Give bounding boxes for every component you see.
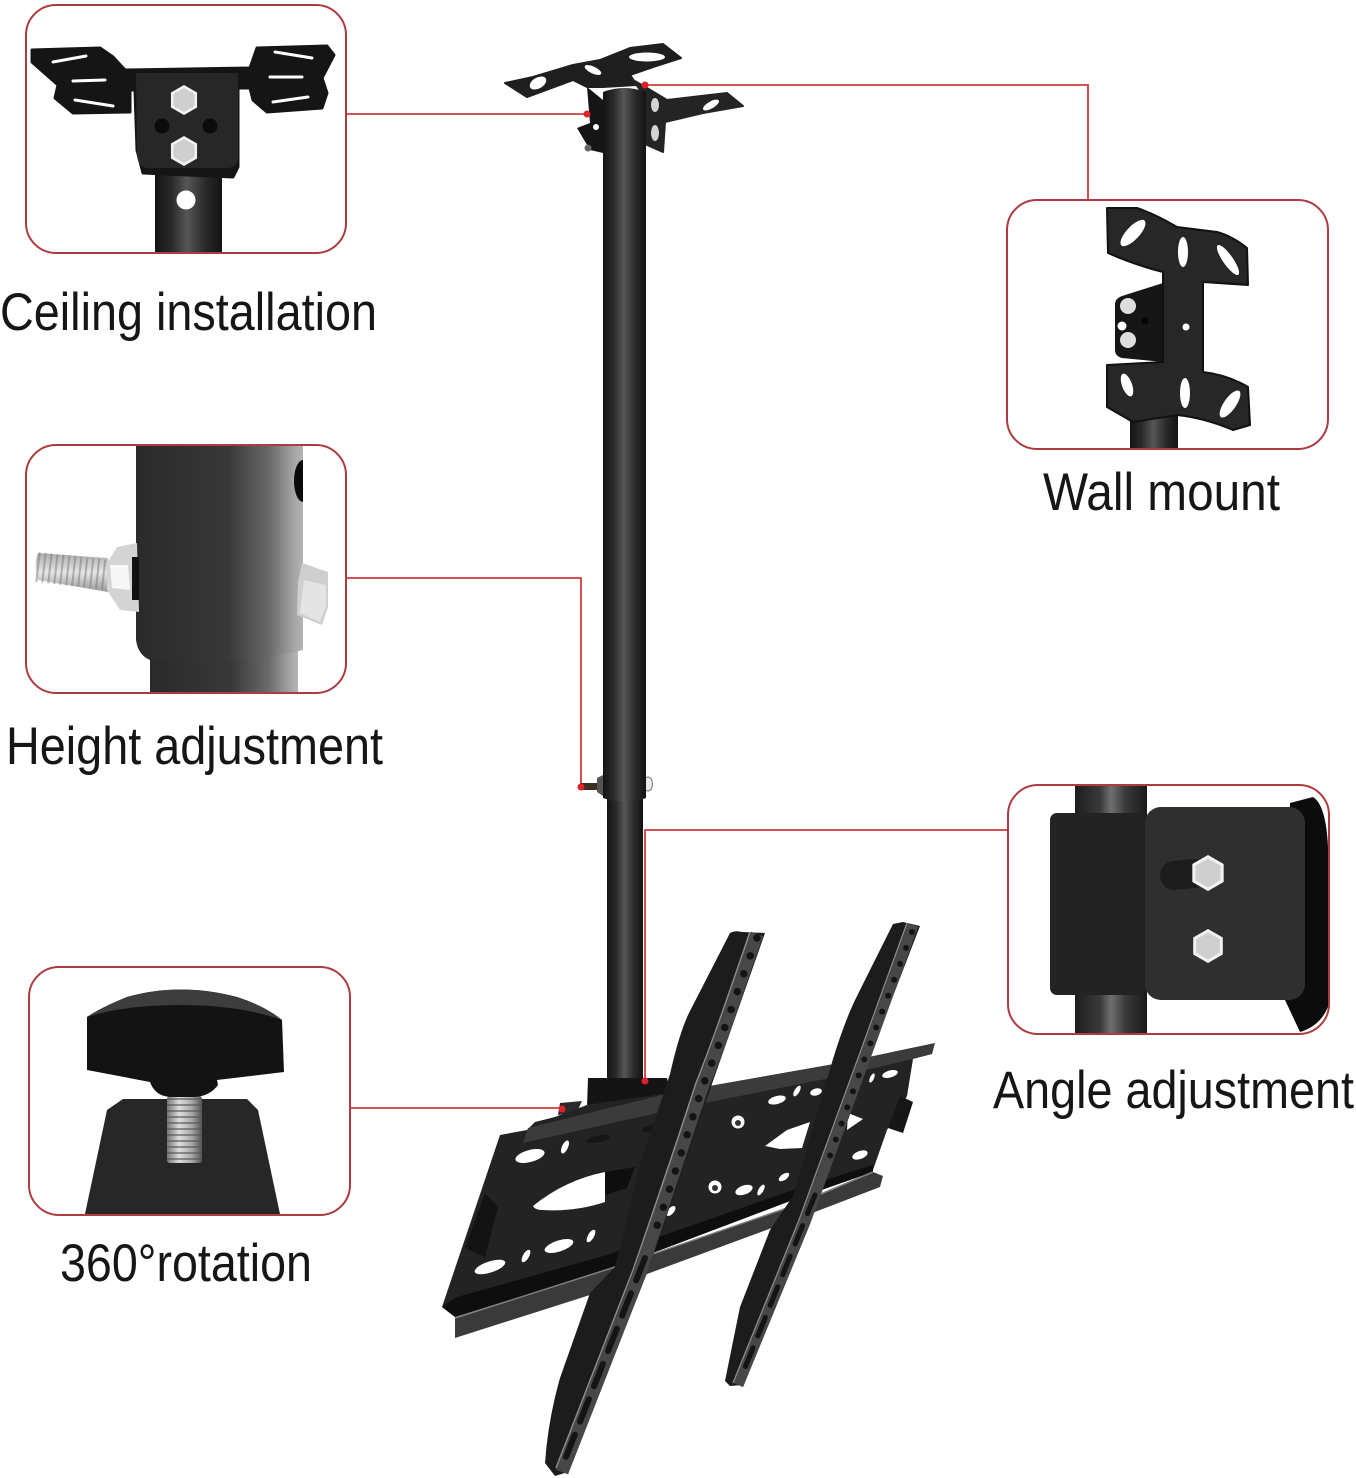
upper tube <box>603 88 646 802</box>
dark rear flange <box>1285 797 1328 1032</box>
mount block <box>587 1078 670 1107</box>
label: 360 rotation: 360°rotation <box>60 1234 312 1293</box>
tube <box>1130 415 1178 448</box>
top ceiling plate <box>505 44 743 153</box>
tube slot <box>294 460 303 502</box>
plate holes <box>1117 216 1244 421</box>
leader line dots <box>558 82 648 1112</box>
panel: height adjustment <box>26 445 346 693</box>
bracket bolts <box>1118 298 1148 348</box>
panel: 360 rotation <box>29 967 350 1215</box>
plate <box>1107 208 1250 430</box>
base plate <box>85 1099 280 1214</box>
lower tube <box>607 790 643 1082</box>
upper tube <box>136 446 303 662</box>
panel: ceiling installation <box>26 5 346 253</box>
right plate <box>1145 807 1305 1000</box>
TV plate <box>442 1043 935 1338</box>
label: height adjustment: Height adjustment <box>6 717 383 776</box>
screw <box>167 1096 202 1163</box>
plate cutouts <box>473 1069 899 1277</box>
label: wall mount: Wall mount <box>1043 463 1280 522</box>
label: ceiling installation: Ceiling installation <box>0 283 377 342</box>
bolts <box>154 85 218 166</box>
panel: angle adjustment <box>1008 785 1329 1034</box>
slot <box>1159 858 1209 891</box>
tube <box>1075 786 1147 1033</box>
knob <box>87 990 284 1097</box>
small pivot <box>558 1101 582 1115</box>
bracket plate <box>32 46 334 177</box>
central mount illustration <box>442 44 935 1476</box>
threaded bolt <box>36 543 139 612</box>
right nut <box>297 563 328 625</box>
lower tube <box>150 650 298 692</box>
tube hole <box>176 190 196 210</box>
left VESA arm <box>545 931 765 1476</box>
leader lines <box>346 85 1088 1108</box>
left block <box>1050 813 1146 995</box>
tube <box>155 165 222 252</box>
bolts <box>1192 855 1224 963</box>
right VESA arm <box>725 922 920 1386</box>
side bracket <box>1115 283 1163 362</box>
height bolt <box>581 775 652 796</box>
wing slots <box>53 52 312 106</box>
panel: wall mount <box>1007 200 1328 449</box>
